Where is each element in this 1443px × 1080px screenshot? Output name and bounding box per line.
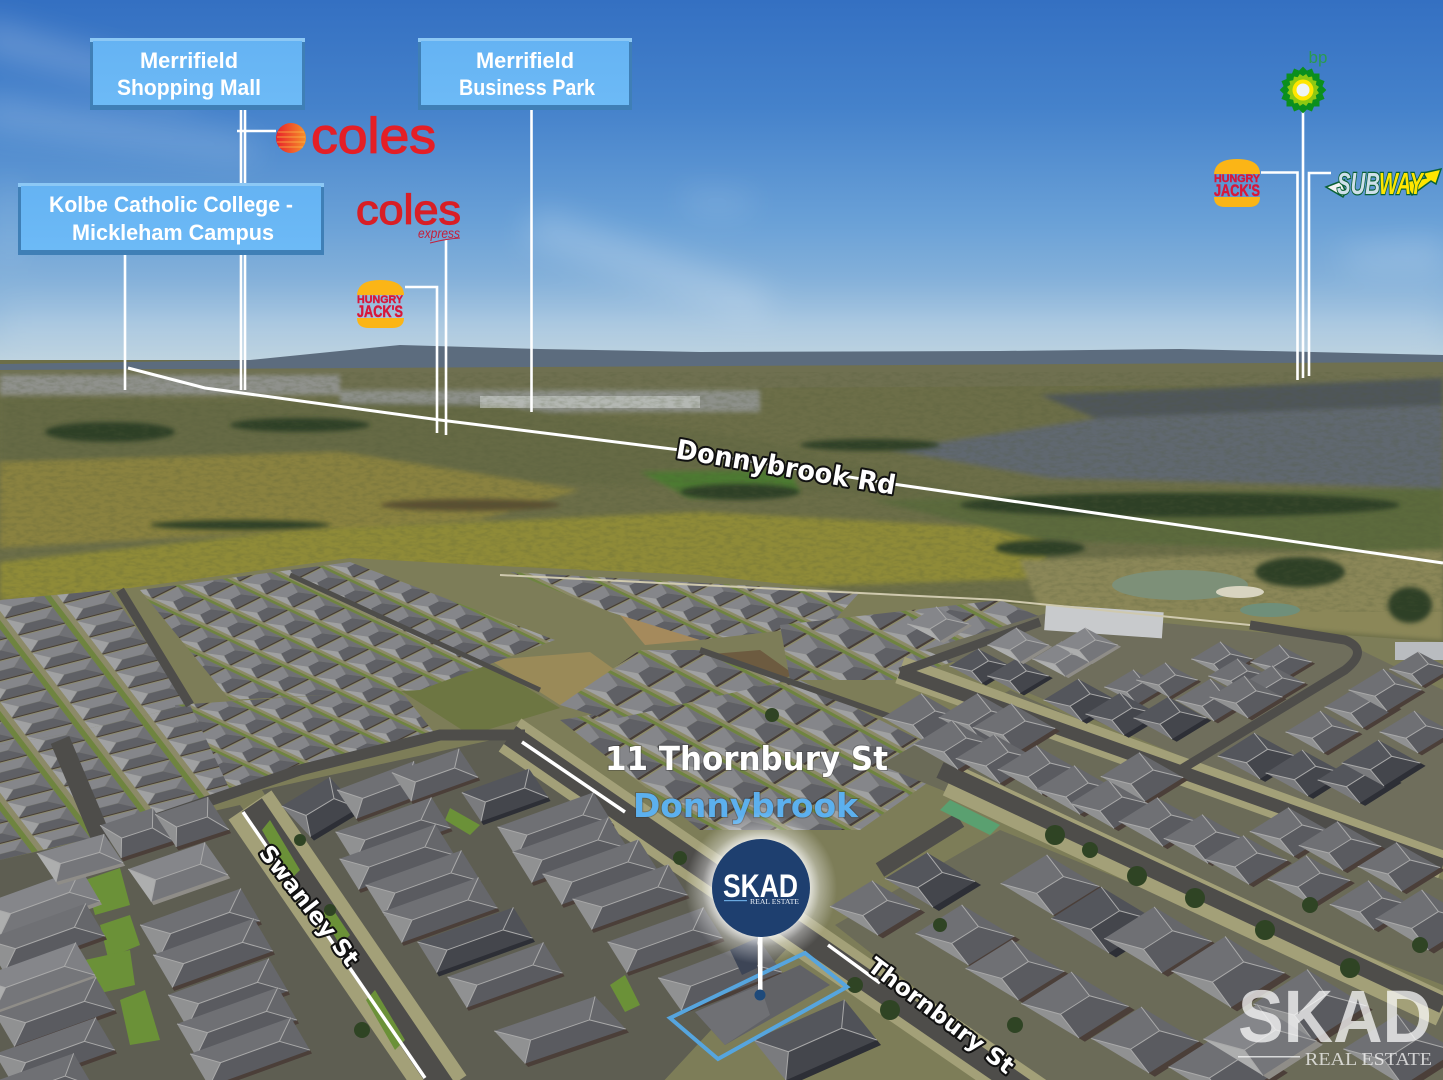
SKAD watermark: REAL ESTATE xyxy=(1305,1049,1432,1069)
connector lines xyxy=(125,110,1331,435)
callout: Merrifield Business Park xyxy=(418,38,632,110)
callout: Kolbe Catholic College: Mickleham Campus xyxy=(72,220,274,245)
aerial landscape: distant hills and fields xyxy=(0,345,1443,660)
houses around the property xyxy=(730,938,881,1080)
street label: Donnybrook Rd: Donnybrook Rd xyxy=(674,434,898,502)
streets xyxy=(60,575,1443,1080)
logo: Coles Express: express xyxy=(418,225,460,241)
logo: Coles: coles xyxy=(311,108,436,164)
logo: BP: bp xyxy=(1309,48,1327,67)
logo: Hungry Jack's right: JACK'S xyxy=(1214,181,1260,200)
logo: BP xyxy=(1280,48,1327,113)
housing estate xyxy=(0,558,1443,1080)
street label: Thornbury St xyxy=(522,742,1019,1080)
sky xyxy=(0,0,1443,360)
pin: SKAD logo marker: REAL ESTATE xyxy=(750,897,799,906)
logo: Coles Express: coles xyxy=(356,186,461,233)
street label: Thornbury St: Thornbury St xyxy=(862,953,1019,1080)
street trees xyxy=(294,708,1428,1038)
callout: Merrifield Shopping Mall xyxy=(90,38,305,110)
subject house roof xyxy=(695,965,830,1045)
bottom-left houses left of Swanley St xyxy=(0,797,312,1080)
logo: Hungry Jack's left: HUNGRY xyxy=(357,294,404,306)
logo: Hungry Jack's right: HUNGRY xyxy=(1214,173,1261,185)
logo: Subway: SUB xyxy=(1337,166,1380,201)
logo: Hungry Jack's left: JACK'S xyxy=(357,302,403,321)
callout: Kolbe Catholic College: Kolbe Catholic College - xyxy=(49,192,293,217)
far house blocks xyxy=(0,562,1443,1080)
callout: Merrifield Business Park: Merrifield xyxy=(476,48,574,73)
callout: Merrifield Shopping Mall: Merrifield xyxy=(140,48,238,73)
pin: SKAD logo marker xyxy=(685,812,837,1000)
pin: SKAD logo marker: SKAD xyxy=(723,868,798,904)
property boundary outline xyxy=(670,953,847,1059)
road line: Donnybrook Rd xyxy=(128,368,1443,563)
SKAD watermark: SKAD xyxy=(1238,975,1432,1058)
wetland pond xyxy=(1112,570,1300,617)
far-left and centre-right houses xyxy=(883,607,1443,932)
yards and lawns xyxy=(85,800,1000,1050)
callout: Merrifield Shopping Mall: Shopping Mall xyxy=(117,75,261,100)
street label: Swanley St xyxy=(243,812,425,1078)
logo: Hungry Jack's left xyxy=(357,280,404,328)
callout: Merrifield Business Park: Business Park xyxy=(459,75,596,100)
address title: 11 Thornbury St xyxy=(605,739,888,778)
street label: Swanley St: Swanley St xyxy=(253,841,364,972)
address title xyxy=(605,739,888,825)
logo: Subway xyxy=(1326,166,1441,201)
address title: Donnybrook xyxy=(633,786,859,825)
park and open ground xyxy=(400,610,795,735)
bottom-right houses xyxy=(830,853,1443,1080)
logo: Hungry Jack's right xyxy=(1214,159,1261,207)
callout: Kolbe Catholic College xyxy=(18,183,324,255)
centre houses between Swanley St and Thornbury St xyxy=(282,749,784,1067)
